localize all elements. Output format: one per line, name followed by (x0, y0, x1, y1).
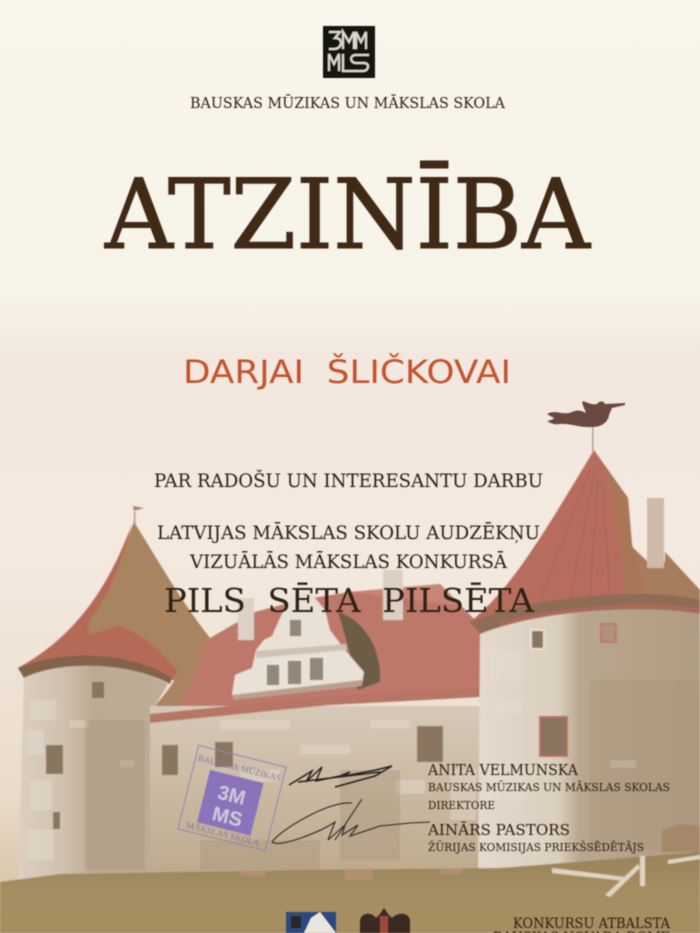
left tower roof (18, 522, 210, 684)
recipient name: DARJAI ŠLIČKOVAI (183, 352, 511, 391)
director: BAUSKAS MŪZIKAS UN MĀKSLAS SKOLAS (428, 780, 670, 794)
director: ANITA VELMUNSKA (427, 761, 578, 779)
signature: Velmunska (289, 766, 392, 787)
logo: BMMS (323, 26, 375, 78)
left tower flag (133, 506, 144, 524)
dark tree by gable (338, 612, 380, 690)
central building wall (150, 706, 480, 880)
contest name (157, 521, 540, 573)
school name: BAUSKAS MŪZIKAS UN MĀKSLAS SKOLA (190, 94, 505, 112)
right tower body (478, 609, 700, 880)
gable windows (266, 619, 324, 686)
signature: Pastors (272, 799, 430, 843)
jury chair (427, 821, 644, 854)
coat of arms: Bauska district (360, 908, 410, 933)
stamp: MS (210, 803, 244, 832)
contest theme: PILS SĒTA PILSĒTA (164, 581, 535, 620)
weathervane (547, 401, 625, 452)
right back roof (600, 540, 700, 612)
central building roof (148, 584, 480, 715)
sponsor note: KONKURSU ATBALSTA (513, 916, 670, 932)
director: DIREKTORE (428, 798, 495, 812)
foreground flowers (240, 868, 462, 880)
illustration: Bauska castle (0, 450, 700, 933)
right tower eave (470, 594, 700, 636)
contest name: LATVIJAS MĀKSLAS SKOLU AUDZĒKŅU (157, 521, 540, 544)
jury chair: ŽŪRIJAS KOMISIJAS PRIEKŠSĒDĒTĀJS (428, 840, 644, 854)
award reason: PAR RADOŠU UN INTERESANTU DARBU (154, 469, 543, 492)
chimneys (238, 598, 254, 640)
stamp: 3M (215, 782, 248, 810)
gable (232, 592, 364, 695)
jury chair: AINĀRS PASTORS (427, 821, 570, 839)
wall brick patches (28, 650, 636, 860)
title: ATZINĪBA (104, 159, 592, 271)
contest name: VIZUĀLĀS MĀKSLAS KONKURSĀ (189, 550, 508, 573)
wall shadows (85, 680, 700, 870)
stamp: BAUSKAS MŪZIKAS (197, 753, 282, 783)
stamp (178, 745, 286, 851)
stamp: MĀKSLAS SKOLA (185, 820, 261, 848)
castle windows (46, 624, 616, 829)
coat of arms: Bauska (286, 912, 336, 933)
right tower roof (470, 450, 645, 622)
ground (0, 852, 700, 933)
director (427, 761, 670, 812)
chimney right (647, 498, 664, 568)
fence (552, 824, 700, 897)
left tower body (18, 666, 168, 885)
